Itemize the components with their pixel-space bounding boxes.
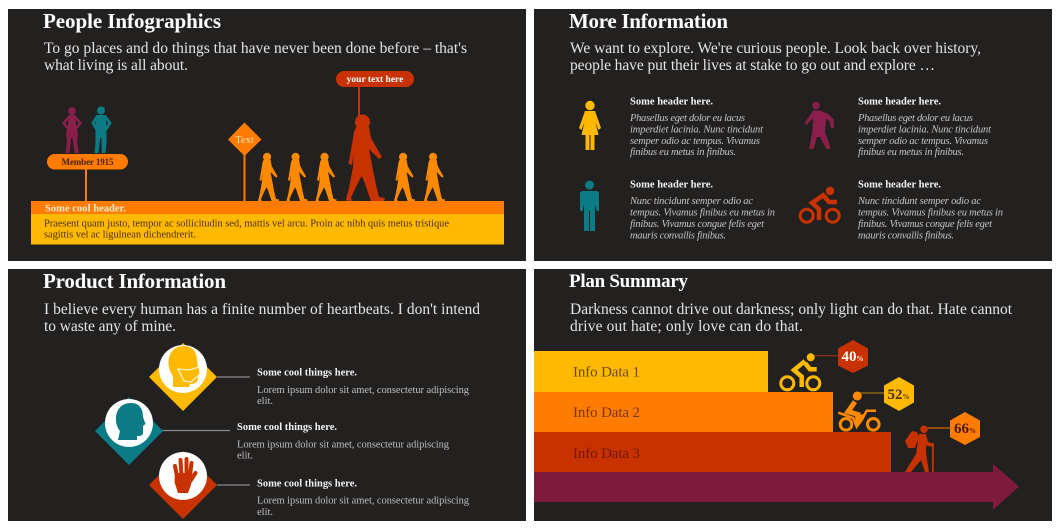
- info block 3: [629, 180, 775, 242]
- info block 1: imperdiet lacinia. Nunc tincidunt: [630, 124, 764, 136]
- icon: walking person: [805, 102, 834, 149]
- text block 3: elit.: [257, 507, 273, 518]
- panel: more information: [534, 9, 1052, 261]
- bar: Info Data 3: [534, 432, 891, 472]
- icon: face mask diamond: [149, 343, 217, 411]
- hexagon: 52%: 52%: [888, 387, 910, 403]
- callout: Member 1915: Member 1915: [62, 157, 114, 167]
- callout: Member 1915: [47, 154, 128, 201]
- big walking person: [346, 114, 385, 201]
- icon: cyclist: [800, 187, 839, 222]
- info block 4: Some header here.: [858, 180, 941, 190]
- title: More Information: More Information: [569, 9, 728, 33]
- callout: your text here: [336, 71, 414, 118]
- hexagon: 40%: [838, 340, 868, 373]
- text bar: sagittis vel ac ligulnean dichendrerit.: [44, 230, 196, 240]
- info block 2: imperdiet lacinia. Nunc tincidunt: [858, 124, 992, 136]
- title: Product Information: Product Information: [43, 269, 226, 293]
- info block 1: Some header here.: [630, 96, 713, 108]
- info block 4: [857, 180, 1003, 242]
- info block 2: Phasellus eget dolor eu lacus: [857, 113, 973, 124]
- panel: plan summary: [534, 269, 1052, 521]
- arrow: [534, 464, 1019, 510]
- hexagon: 66%: [950, 412, 980, 445]
- title: Plan Summary: Plan Summary: [569, 271, 688, 292]
- icon: man standing: [93, 106, 110, 153]
- header bar: [31, 201, 504, 214]
- info block 1: [629, 96, 764, 158]
- info block 4: finibus. Vivamus congue felis eget: [858, 219, 993, 230]
- panel: product information: [8, 269, 526, 521]
- hexagon: 66%: 66%: [954, 421, 976, 437]
- hexagon: 52%: [884, 377, 914, 411]
- icon: woman standing: [64, 107, 80, 153]
- info block 1: Phasellus eget dolor eu lacus: [629, 113, 745, 124]
- text block 2: Some cool things here.: [237, 422, 337, 433]
- intro text: Darkness cannot drive out darkness; only light can do that. Hate cannot: [570, 301, 1013, 318]
- intro text: To go places and do things that have never been done before – that's: [44, 40, 467, 57]
- icon: hiker: [905, 426, 950, 472]
- intro text: what living is all about.: [44, 57, 188, 74]
- signpost: Text: Text: [235, 135, 254, 146]
- info block 1: semper odio ac tempus. Vivamus: [630, 136, 760, 147]
- bar: Info Data 1: [534, 351, 768, 392]
- info block 3: mauris convallis finibus.: [630, 230, 726, 242]
- text block 2: elit.: [237, 450, 253, 462]
- bar: Info Data 3: Info Data 3: [573, 446, 640, 462]
- icon: cyclist yellow: [781, 353, 838, 390]
- text block 3: Some cool things here.: [257, 478, 357, 490]
- info block 3: Nunc tincidunt semper odio ac: [629, 196, 753, 207]
- icon: motorbike rider: [838, 392, 884, 430]
- intro text: [570, 301, 1013, 335]
- intro text: [44, 301, 480, 335]
- signpost: Text: [228, 122, 262, 201]
- connector lines: [162, 377, 250, 485]
- text block 1: [257, 368, 470, 407]
- info block 3: Some header here.: [630, 180, 713, 190]
- info block 4: mauris convallis finibus.: [858, 230, 954, 242]
- intro text: drive out hate; only love can do that.: [570, 318, 803, 335]
- hexagon: 40%: 40%: [842, 349, 864, 365]
- info block 4: Nunc tincidunt semper odio ac: [857, 196, 981, 207]
- icon: hand diamond: [149, 451, 217, 519]
- bar: Info Data 2: Info Data 2: [573, 405, 640, 421]
- text block 2: Lorem ipsum dolor sit amet, consectetur adipiscing: [237, 440, 450, 450]
- title: People Infographics: People Infographics: [43, 9, 221, 33]
- bar: Info Data 2: [534, 392, 833, 432]
- callout: your text here: your text here: [347, 75, 403, 85]
- text block 2: [237, 422, 450, 462]
- info block 4: tempus. Vivamus finibus eu metus in: [858, 208, 1003, 218]
- intro text: [570, 40, 981, 74]
- bar: Info Data 1: Info Data 1: [573, 364, 640, 380]
- info block 3: tempus. Vivamus finibus eu metus in: [630, 208, 775, 218]
- header bar: Some cool header.: [45, 204, 126, 214]
- intro text: people have put their lives at stake to go out and explore …: [570, 57, 935, 74]
- intro text: I believe every human has a finite number of heartbeats. I don't intend: [44, 301, 480, 318]
- icon: head diamond: [95, 397, 163, 465]
- info block 2: Some header here.: [858, 96, 941, 108]
- walking people row: [258, 153, 445, 201]
- info block 2: finibus eu metus in finibus.: [858, 147, 964, 158]
- text block 3: [257, 478, 470, 518]
- text block 1: elit.: [257, 396, 273, 407]
- info block 2: semper odio ac tempus. Vivamus: [858, 136, 988, 147]
- intro text: to waste any of mine.: [44, 318, 176, 335]
- text block 1: Lorem ipsum dolor sit amet, consectetur adipiscing: [257, 385, 470, 396]
- text bar: [31, 214, 504, 244]
- info block 1: finibus eu metus in finibus.: [630, 147, 736, 158]
- text block 3: Lorem ipsum dolor sit amet, consectetur adipiscing: [257, 496, 470, 506]
- panel: people infographics: [8, 9, 526, 261]
- icon: man: [580, 180, 599, 231]
- intro text: We want to explore. We're curious people. Look back over history,: [570, 40, 981, 57]
- info block 3: finibus. Vivamus congue felis eget: [630, 219, 765, 230]
- text block 1: Some cool things here.: [257, 368, 357, 378]
- info block 2: [857, 96, 992, 158]
- text bar: Praesent quam justo, tempor ac sollicitudin sed, mattis vel arcu. Proin ac nibh quis metus tristique: [44, 218, 449, 230]
- icon: woman: [579, 101, 601, 150]
- intro text: [44, 40, 467, 74]
